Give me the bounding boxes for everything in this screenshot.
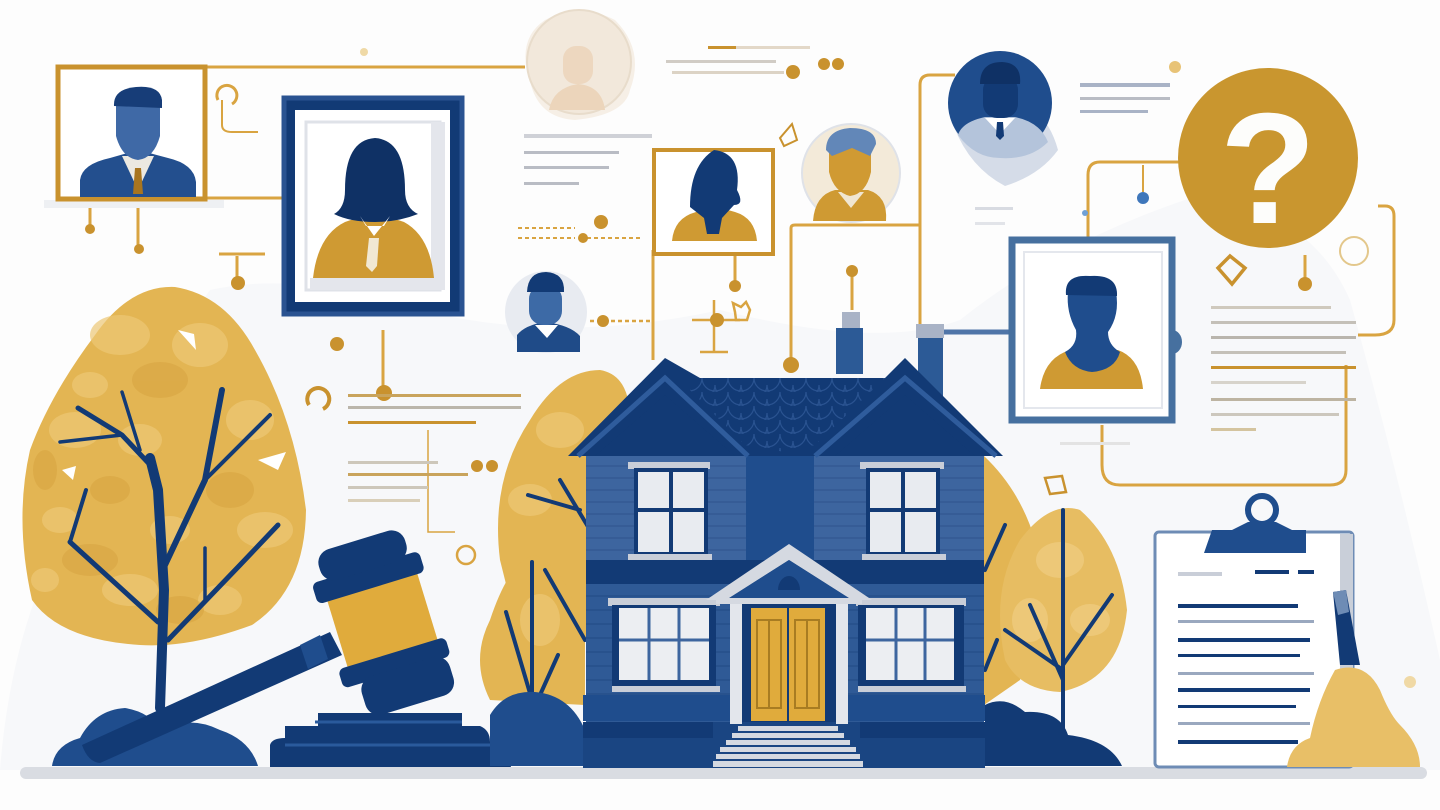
- gold shrub: [1287, 668, 1420, 767]
- portrait: man in navy circle top right: [948, 51, 1058, 186]
- question mark badge: [1178, 68, 1358, 257]
- house: lower windows: [608, 598, 966, 692]
- house: roof: [568, 358, 1003, 456]
- house: steps: [713, 726, 863, 767]
- clipboard: [1155, 496, 1353, 767]
- blue node: [1082, 165, 1149, 216]
- gavel: [82, 524, 511, 767]
- tree: behind house left: [480, 370, 630, 705]
- portrait: framed woman: [284, 98, 462, 314]
- house: [568, 312, 1003, 768]
- shrubs left: [52, 708, 258, 766]
- connector lines: [90, 67, 1394, 532]
- ground line: [20, 767, 1427, 779]
- pen: [1333, 590, 1360, 665]
- portrait: framed woman centre: [654, 150, 773, 254]
- text lines: top centre: [524, 46, 810, 185]
- house: chimneys: [836, 312, 944, 396]
- house: upper storey: [586, 455, 984, 584]
- portrait: man in circle small: [505, 271, 587, 353]
- tree: large left: [22, 287, 306, 708]
- question mark badge: ?: [1220, 81, 1316, 257]
- text lines: right: [1060, 306, 1356, 445]
- portrait: framed man top left: [44, 67, 224, 208]
- house: porch: [706, 544, 872, 724]
- house: front door: [751, 608, 825, 721]
- tree: behind house right: [984, 456, 1127, 730]
- small outline icons: [217, 85, 1368, 564]
- connector nodes: [85, 48, 1312, 472]
- text lines: top right: [975, 83, 1170, 225]
- clipboard: text lines: [1178, 570, 1314, 744]
- text lines: left centre: [348, 394, 521, 502]
- clipboard: clip: [1204, 496, 1306, 553]
- portrait: faded bust top centre: [525, 10, 635, 120]
- house: upper windows: [628, 462, 946, 560]
- house: lower storey: [583, 584, 985, 768]
- shrubs by house: [490, 692, 1122, 766]
- portrait: man in circle centre: [802, 124, 900, 222]
- portrait: framed man right: [1012, 240, 1182, 420]
